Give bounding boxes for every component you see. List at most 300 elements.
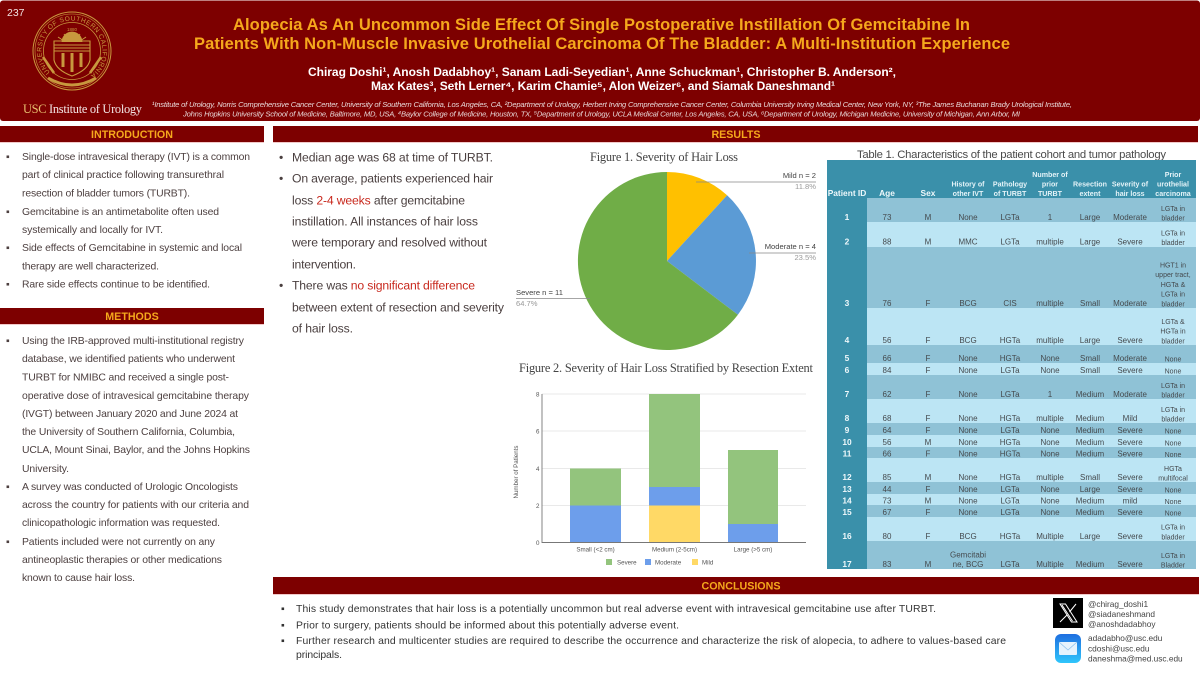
table row 14: M xyxy=(925,496,932,506)
methods bullets: Patients included were not currently on any xyxy=(22,537,216,548)
conclusions bullets: principals. xyxy=(296,650,342,661)
table row 13: 13 xyxy=(842,484,852,494)
table header: TURBT xyxy=(1038,190,1063,198)
table row 6: F xyxy=(926,366,931,375)
table row 3: HGTa & xyxy=(1161,282,1186,289)
table row 1: None xyxy=(958,213,978,222)
axis labels: Large (>5 cm) xyxy=(734,546,772,554)
label: moderate: Moderate n = 4 xyxy=(765,242,816,251)
methods bullets xyxy=(6,336,250,584)
table row 1 xyxy=(845,206,1185,222)
table row 16: Large xyxy=(1080,532,1101,541)
table row 3: LGTa in xyxy=(1161,292,1185,298)
table row 2: LGTa in xyxy=(1161,230,1185,238)
table row 2 xyxy=(845,230,1185,247)
table row 5: Moderate xyxy=(1113,354,1147,363)
introduction bullets: ▪ xyxy=(6,243,10,254)
conclusions bullets: ▪ xyxy=(281,604,285,615)
introduction bullets: therapy are well characterized. xyxy=(22,262,159,272)
methods bullets: database, we identified patients who underwent xyxy=(22,354,235,365)
label: moderate xyxy=(749,242,816,262)
table row 9: None xyxy=(1165,428,1181,436)
table header: Sex xyxy=(921,188,936,198)
introduction bullets: Side effects of Gemcitabine in systemic and local xyxy=(22,243,242,254)
table row 4: HGTa in xyxy=(1160,328,1186,336)
stacked bar chart: severity by resection extent xyxy=(513,392,806,566)
label: severe: Severe n = 11 xyxy=(516,288,563,297)
table row 16: F xyxy=(926,532,931,541)
table row 3 xyxy=(845,262,1191,308)
table row 8: F xyxy=(926,414,931,423)
panel: introduction xyxy=(0,126,264,290)
conclusions bullets: Further research and multicenter studies are required to describe the occurrence and characterize the risk of alopecia, to adhere to values-based care xyxy=(296,636,1006,647)
bars: medium xyxy=(649,394,700,542)
table row 9: Medium xyxy=(1076,426,1105,435)
methods bullets: (IVGT) between January 2020 and June 2024 at xyxy=(22,409,238,420)
methods bullets: known to cause hair loss. xyxy=(22,573,135,584)
table row 9: None xyxy=(1040,426,1060,435)
table row 15: None xyxy=(958,508,978,517)
bars: small xyxy=(570,468,621,542)
introduction bullets: ▪ xyxy=(6,207,10,218)
table row 16: 80 xyxy=(883,532,892,541)
table row 16: Severe xyxy=(1117,532,1143,541)
table row 16: 16 xyxy=(842,531,852,541)
table header: Prior xyxy=(1165,171,1182,179)
table row 15: LGTa xyxy=(1000,508,1020,517)
table row 11: 11 xyxy=(843,448,852,458)
title: Patients With Non-Muscle Invasive Urothelial Carcinoma Of The Bladder: A Multi-Institution Experience xyxy=(194,35,1010,53)
methods bullets: ▪ xyxy=(6,336,10,347)
table row 13: None xyxy=(1040,485,1060,494)
table row 8: LGTa in xyxy=(1161,407,1185,414)
methods bullets: across the country for patients with our criteria and xyxy=(22,500,249,511)
table row 3: 76 xyxy=(883,299,892,308)
table row 6: Small xyxy=(1080,366,1100,375)
heading: methods xyxy=(0,308,264,324)
table row 15: Severe xyxy=(1117,508,1143,517)
table row 5: None xyxy=(958,354,978,363)
panel: methods xyxy=(0,308,264,584)
table row 7: Moderate xyxy=(1113,390,1147,399)
introduction bullets: part of clinical practice following transurethral xyxy=(22,170,224,181)
results bullets xyxy=(279,150,505,336)
table row 7 xyxy=(845,383,1185,400)
legend: Mild xyxy=(702,560,714,566)
table row 11: F xyxy=(926,450,931,458)
axis labels: 2 xyxy=(536,503,540,510)
introduction bullets: systemically and locally for IVT. xyxy=(22,225,163,236)
table row 9: F xyxy=(926,426,931,435)
table row 14: Medium xyxy=(1076,496,1105,506)
table row 3: BCG xyxy=(959,299,977,308)
table row 7: LGTa xyxy=(1000,390,1020,399)
conclusions bullets: Prior to surgery, patients should be informed about this potentially adverse event. xyxy=(296,620,679,632)
heading: introduction: INTRODUCTION xyxy=(91,129,173,141)
introduction bullets: Rare side effects continue to be identified. xyxy=(22,280,210,290)
label: mild: Mild n = 2 xyxy=(783,171,816,180)
table row 7: Medium xyxy=(1076,390,1105,399)
results bullets: instillation. All instances of hair loss xyxy=(292,214,478,228)
introduction bullets: resection of bladder tumors (TURBT). xyxy=(22,188,190,200)
label: mild: 11.8% xyxy=(795,182,816,191)
table row 7: 62 xyxy=(883,390,892,399)
table row 2: 88 xyxy=(883,238,892,246)
contact emails xyxy=(1088,633,1183,664)
USC Institute of Urology wordmark: USC Institute of Urology xyxy=(23,102,143,116)
affiliations: Johns Hopkins University School of Medicine, Baltimore, MD, USA, ⁴Baylor College of Medicine, Houston, TX, ⁵Department of Urology, UCLA Medical Center, Los Angeles, CA, USA, ⁶Department of Urology, Michigan Medicine, University of Michigan, Ann Arbor, MI xyxy=(182,110,1021,118)
table header: Severity of xyxy=(1112,180,1149,188)
heading: results: RESULTS xyxy=(711,129,761,141)
table row 8 xyxy=(845,407,1185,424)
table header: urothelial xyxy=(1157,180,1189,188)
table row 6 xyxy=(845,365,1181,376)
table row 8: HGTa xyxy=(1000,414,1021,423)
conclusions bullets: ▪ xyxy=(281,620,285,632)
table row 14: None xyxy=(958,496,978,506)
table row 13: None xyxy=(1165,488,1181,494)
table row 3: CIS xyxy=(1003,299,1017,308)
table row 15: Medium xyxy=(1076,508,1105,517)
table row 12: multiple xyxy=(1036,473,1064,482)
table row 11: Severe xyxy=(1117,450,1143,458)
table row 7: LGTa in xyxy=(1161,383,1185,390)
table row 8: bladder xyxy=(1161,416,1185,424)
table row 4: 56 xyxy=(883,336,892,345)
table row 17: ne, BCG xyxy=(953,560,983,569)
table row 5: None xyxy=(1040,354,1060,363)
table row 9: 9 xyxy=(845,425,850,435)
table row 14: None xyxy=(1040,496,1060,506)
bars: large xyxy=(728,450,778,542)
table header: History of xyxy=(951,180,985,188)
table row 3: upper tract, xyxy=(1155,272,1191,279)
table row 15 xyxy=(842,507,1181,518)
table row 10: None xyxy=(958,438,978,447)
table row 2: MMC xyxy=(958,238,978,246)
table row 3: F xyxy=(926,299,931,308)
table row 5: F xyxy=(926,354,931,363)
conclusions bullets: This study demonstrates that hair loss is a potentially uncommon but real adverse event with intravesical gemcitabine use after TURBT. xyxy=(296,604,936,615)
table row 11: None xyxy=(1040,450,1060,458)
table row 7: None xyxy=(958,390,978,399)
table row 13: F xyxy=(926,485,931,494)
table row 4: BCG xyxy=(959,336,977,345)
table row 2: LGTa xyxy=(1000,238,1020,246)
table row 11: Medium xyxy=(1076,450,1105,458)
table row 11 xyxy=(843,448,1181,459)
table row 14: mild xyxy=(1123,496,1137,506)
axis labels: 0 xyxy=(536,540,540,547)
table row 10: M xyxy=(925,438,932,447)
table row 10: Medium xyxy=(1076,438,1105,447)
table row 1: 1 xyxy=(1048,213,1053,222)
table row 5: 66 xyxy=(883,354,892,363)
axis labels: Medium (2-5cm) xyxy=(652,546,697,554)
table row 4: 4 xyxy=(845,335,850,345)
table row 6: None xyxy=(958,366,978,375)
table row 7: F xyxy=(926,390,931,399)
table row 15: None xyxy=(1040,508,1060,517)
table row 12: Severe xyxy=(1117,473,1143,482)
table row 16: BCG xyxy=(959,532,977,541)
table row 8: Mild xyxy=(1123,414,1137,423)
table row 5: HGTa xyxy=(1000,354,1021,363)
table row 6: Severe xyxy=(1117,366,1143,375)
table row 6: None xyxy=(1040,366,1060,375)
table row 7: bladder xyxy=(1161,392,1185,400)
methods bullets: Using the IRB-approved multi-institutional registry xyxy=(22,336,245,347)
table row 5: Small xyxy=(1080,354,1100,363)
table row 17: M xyxy=(925,560,932,569)
introduction bullets: ▪ xyxy=(6,280,10,290)
table row 11: None xyxy=(1165,452,1181,459)
table row 4: bladder xyxy=(1161,338,1185,346)
table row 14: 73 xyxy=(883,496,892,506)
table row 3: Moderate xyxy=(1113,299,1147,308)
table header: carcinoma xyxy=(1155,190,1191,198)
table row 5: 5 xyxy=(845,353,850,363)
methods bullets: the University of Southern California, Columbia, xyxy=(22,427,235,438)
table row 4: Large xyxy=(1080,336,1101,345)
table row 14: 14 xyxy=(842,496,852,506)
table header: Resection xyxy=(1073,180,1107,188)
introduction bullets: ▪ xyxy=(6,152,10,163)
poster number: 237 xyxy=(7,7,25,19)
methods bullets: operative dose of intravesical gemcitabine therapy xyxy=(22,391,250,402)
social handles: @anoshdadabhoy xyxy=(1088,619,1156,629)
USC seal: UNIVERSITY OF SOUTHERN CALIFORNIA xyxy=(36,16,108,78)
methods bullets: ▪ xyxy=(6,482,10,493)
methods bullets: A survey was conducted of Urologic Oncologists xyxy=(22,482,238,493)
table row 17: Bladder xyxy=(1161,562,1186,570)
table row 17: LGTa xyxy=(1000,560,1020,569)
results bullets: • xyxy=(279,150,283,164)
table row 13: 44 xyxy=(883,485,892,494)
table row 4 xyxy=(845,319,1186,346)
table row 3: bladder xyxy=(1161,302,1185,308)
authors: Chirag Doshi¹, Anosh Dadabhoy¹, Sanam Ladi-Seyedian¹, Anne Schuckman¹, Christopher B. Anderson², xyxy=(308,65,896,79)
heading: results xyxy=(273,126,1198,142)
pie chart: severity of hair loss xyxy=(516,171,816,350)
social handles: @chirag_doshi1 xyxy=(1088,599,1148,609)
axis labels: 8 xyxy=(536,392,540,398)
table row 12: HGTa xyxy=(1164,466,1182,473)
table row 8: 8 xyxy=(845,413,850,423)
results bullets: of hair loss. xyxy=(292,322,353,336)
methods bullets: UCLA, Mount Sinai, Baylor, and the Johns Hopkins xyxy=(22,445,250,456)
table row 15: 67 xyxy=(883,508,892,517)
table row 12: 85 xyxy=(883,473,892,482)
table header: prior xyxy=(1042,180,1058,188)
results bullets: • xyxy=(279,278,283,292)
axis labels xyxy=(513,392,772,554)
panel: conclusions xyxy=(273,577,1199,664)
figure 2 title: Figure 2. Severity of Hair Loss Stratified by Resection Extent xyxy=(519,361,814,375)
table header: hair loss xyxy=(1115,190,1145,198)
table header: of TURBT xyxy=(994,190,1027,198)
table row 8: Medium xyxy=(1076,414,1105,423)
table row 16: LGTa in xyxy=(1161,524,1185,532)
title: Alopecia As An Uncommon Side Effect Of Single Postoperative Instillation Of Gemcitabine In xyxy=(233,16,970,34)
affiliations: ¹Institute of Urology, Norris Comprehensive Cancer Center, University of Southern California, Los Angeles, CA, ²Department of Urology, Herbert Irving Comprehensive Cancer Center, Columbia University Irving Medical Center, New York, NY, ³The James Buchanan Brady Urological Institute, xyxy=(152,100,1072,109)
table row 2: Large xyxy=(1080,238,1101,246)
results bullets: loss 2-4 weeks after gemcitabine xyxy=(292,194,465,208)
table row 3: HGT1 in xyxy=(1160,262,1186,270)
table row 10: HGTa xyxy=(1000,438,1021,447)
results bullets: between extent of resection and severity xyxy=(292,300,505,314)
table row 16: Multiple xyxy=(1036,532,1064,541)
table row 1: bladder xyxy=(1161,216,1185,222)
table row 13: LGTa xyxy=(1000,485,1020,494)
table row 16: bladder xyxy=(1161,534,1185,542)
table row 13: Large xyxy=(1080,485,1101,494)
table row 14: LGTa xyxy=(1000,496,1020,506)
table row 4: HGTa xyxy=(1000,336,1021,345)
table row 9: LGTa xyxy=(1000,426,1020,435)
figure 1 title: Figure 1. Severity of Hair Loss xyxy=(590,150,738,164)
table row 12: multifocal xyxy=(1158,476,1188,482)
table row 17: 17 xyxy=(842,559,852,569)
heading: methods: METHODS xyxy=(105,311,159,323)
table row 9: None xyxy=(958,426,978,435)
table row 9: Severe xyxy=(1117,426,1143,435)
table row 17: LGTa in xyxy=(1161,553,1185,560)
header banner xyxy=(0,0,1200,121)
table row 10: 10 xyxy=(842,437,852,447)
results bullets: intervention. xyxy=(292,258,356,272)
heading: conclusions: CONCLUSIONS xyxy=(702,580,780,592)
table row 12: HGTa xyxy=(1000,473,1021,482)
axis labels: 4 xyxy=(536,466,540,473)
table row 12: M xyxy=(925,473,932,482)
USC seal: 1880 xyxy=(67,27,78,32)
table row 1: 73 xyxy=(883,213,892,222)
table row 9 xyxy=(845,425,1181,436)
table row 3: multiple xyxy=(1036,299,1064,308)
table: patient characteristics xyxy=(827,160,1196,570)
table row 2: bladder xyxy=(1161,240,1185,247)
table row 17: Gemcitabi xyxy=(950,550,986,560)
table row 14: None xyxy=(1165,499,1181,506)
table row 3: 3 xyxy=(845,298,850,308)
methods bullets: ▪ xyxy=(6,537,10,548)
table row 13 xyxy=(842,484,1181,494)
legend: Severe xyxy=(617,560,637,566)
table header: other IVT xyxy=(953,190,984,198)
label: severe: 64.7% xyxy=(516,299,538,308)
table row 7: 7 xyxy=(845,389,850,399)
table row 10: 56 xyxy=(883,438,892,447)
results bullets: • xyxy=(279,172,283,186)
results bullets: Median age was 68 at time of TURBT. xyxy=(292,150,493,164)
introduction bullets: Gemcitabine is an antimetabolite often used xyxy=(22,207,219,218)
title xyxy=(194,16,1010,53)
table row 13: Severe xyxy=(1117,485,1143,494)
conclusions bullets xyxy=(281,604,1006,661)
table row 13: None xyxy=(958,485,978,494)
icon: X logo xyxy=(1053,598,1083,628)
table row 10: Severe xyxy=(1117,438,1143,447)
table row 12: None xyxy=(958,473,978,482)
table row 11: None xyxy=(958,450,978,458)
axis labels: 6 xyxy=(536,428,540,436)
table row 5: None xyxy=(1165,356,1181,364)
results bullets: were temporary and resolved without xyxy=(291,236,488,250)
legend xyxy=(606,559,714,566)
contact emails: adadabho@usc.edu xyxy=(1088,633,1163,643)
table row 1: LGTa xyxy=(1000,213,1020,222)
authors xyxy=(308,65,896,93)
table row 14 xyxy=(842,496,1181,506)
authors: Max Kates³, Seth Lerner⁴, Karim Chamie⁵, Alon Weizer⁶, and Siamak Daneshmand¹ xyxy=(371,79,835,93)
label: moderate: 23.5% xyxy=(794,253,816,262)
label: severe xyxy=(516,288,590,308)
table row 11: 66 xyxy=(883,450,892,458)
table header: Number of xyxy=(1032,171,1068,179)
table row 2: Severe xyxy=(1117,238,1143,246)
introduction bullets: Single-dose intravesical therapy (IVT) is a common xyxy=(22,152,250,163)
axis labels: Number of Patients xyxy=(513,446,520,498)
methods bullets: TURBT for NMIBC and received a single post- xyxy=(22,372,229,384)
social handles xyxy=(1088,599,1156,629)
table row 6: 84 xyxy=(883,366,892,375)
table row 6: 6 xyxy=(845,365,850,375)
legend: Moderate xyxy=(655,560,682,566)
table row 12 xyxy=(842,466,1188,482)
icon: mail xyxy=(1055,634,1081,663)
table row 10: None xyxy=(1040,438,1060,447)
table row 10 xyxy=(842,437,1181,448)
heading: introduction xyxy=(0,126,264,142)
conclusions bullets: ▪ xyxy=(281,636,285,647)
methods bullets: antineoplastic therapies or other medications xyxy=(22,555,222,566)
results bullets: There was no significant difference xyxy=(292,278,475,292)
label: mild xyxy=(696,171,816,191)
table row 3: Small xyxy=(1080,299,1100,308)
table row 10: None xyxy=(1165,440,1181,448)
table row 1: Large xyxy=(1080,213,1101,222)
table row 8: None xyxy=(958,414,978,423)
table row 7: 1 xyxy=(1048,390,1053,399)
table row 6: LGTa xyxy=(1000,366,1020,375)
table row 4: LGTa & xyxy=(1161,319,1185,326)
table row 16 xyxy=(842,524,1185,542)
table row 9: 64 xyxy=(883,426,892,435)
table row 4: Severe xyxy=(1117,336,1143,345)
contact emails: daneshma@med.usc.edu xyxy=(1088,654,1183,664)
heading: conclusions xyxy=(273,577,1199,594)
table row 12: 12 xyxy=(842,472,852,482)
affiliations xyxy=(152,100,1072,118)
table row 17: Medium xyxy=(1076,560,1105,569)
table row 1: Moderate xyxy=(1113,213,1147,222)
table row 15: F xyxy=(926,508,931,517)
table row 12: Small xyxy=(1080,473,1100,482)
introduction bullets xyxy=(6,152,250,290)
table row 15: 15 xyxy=(842,507,852,517)
social handles: @siadaneshmand xyxy=(1088,609,1155,619)
table row 1: 1 xyxy=(845,212,850,222)
contact emails: cdoshi@usc.edu xyxy=(1088,644,1150,654)
table header xyxy=(828,171,1191,198)
table row 11: HGTa xyxy=(1000,450,1021,458)
table row 17: Multiple xyxy=(1036,560,1064,569)
table row 15: None xyxy=(1165,510,1181,518)
table row 17 xyxy=(842,550,1186,570)
table header: Age xyxy=(879,188,895,198)
table row 2: 2 xyxy=(845,236,850,246)
